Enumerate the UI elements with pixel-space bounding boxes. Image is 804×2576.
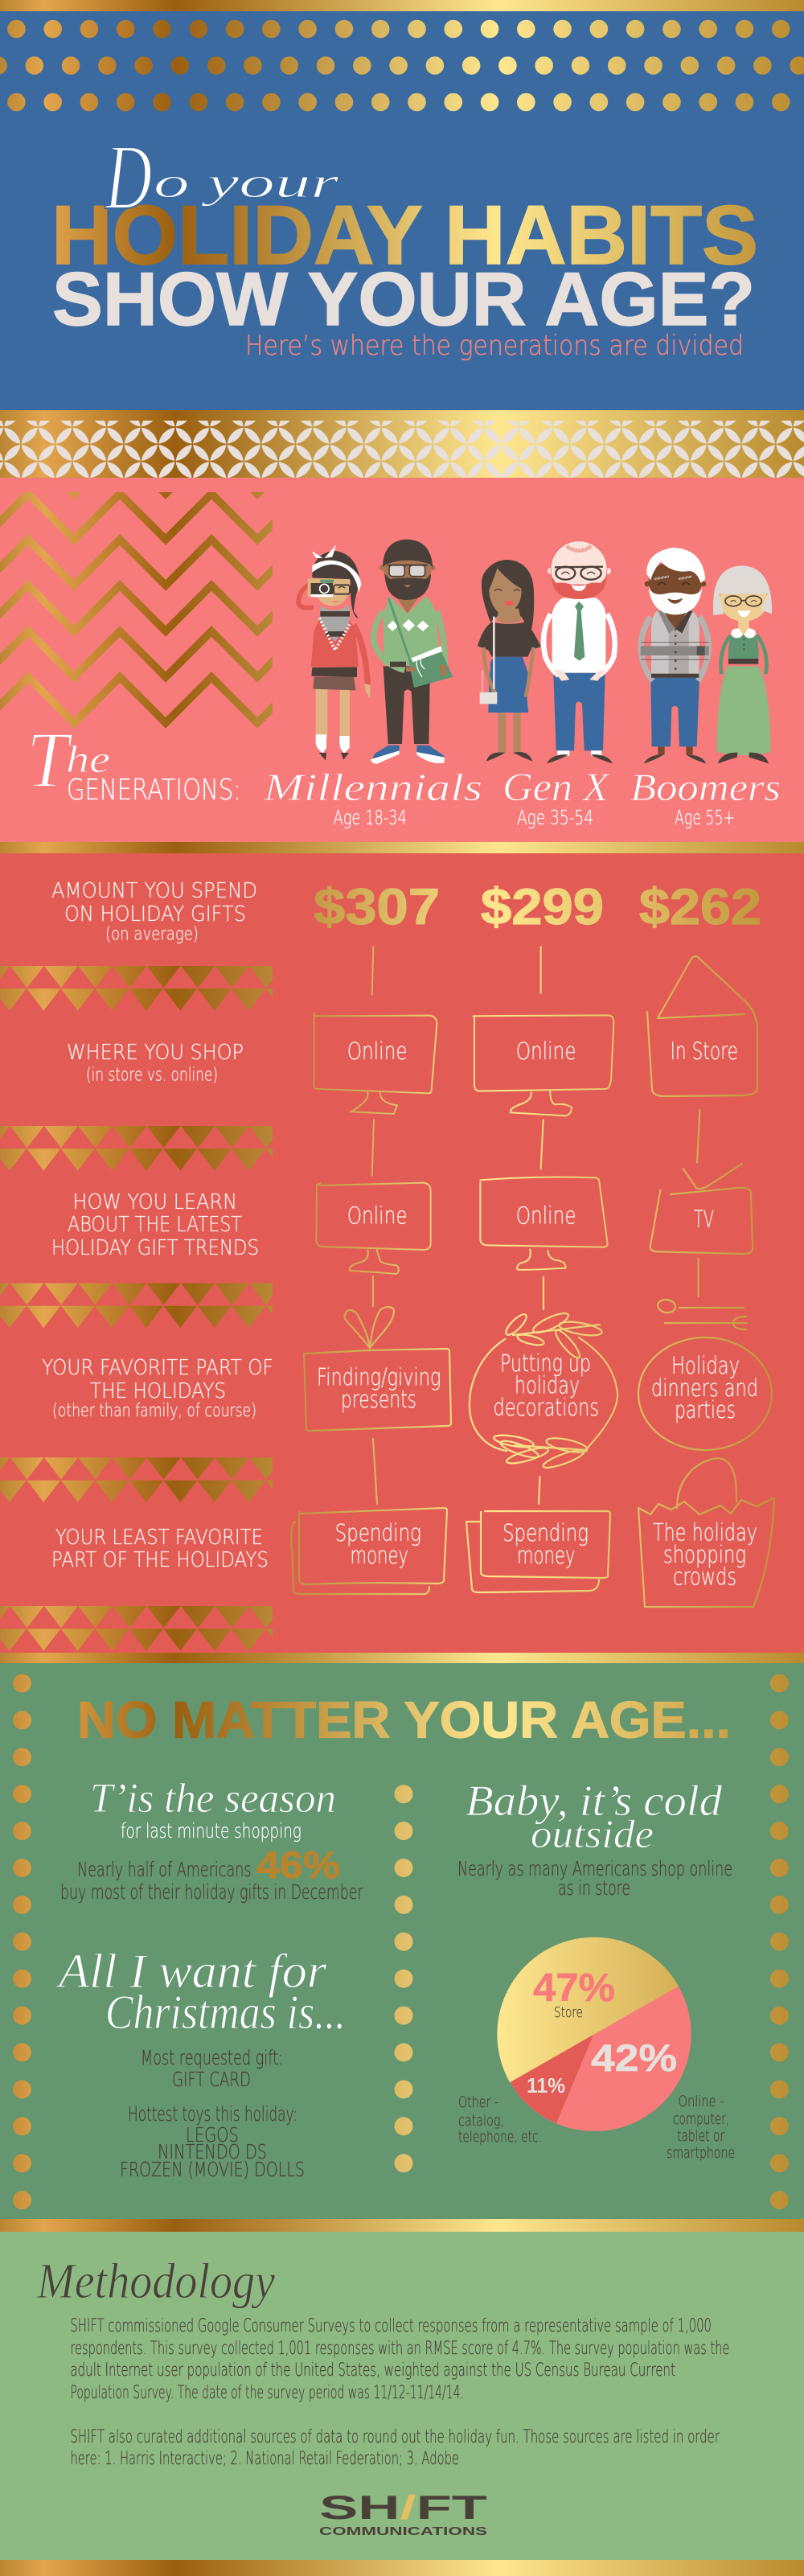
block: last minute shopping — [60, 1776, 363, 1904]
methodology text: Population Survey. The date of the survey period was 11/12-11/14/14. — [70, 2383, 464, 2403]
icon: store — [647, 956, 757, 1096]
block: last minute shopping: for last minute shopping — [121, 1819, 302, 1843]
logo: shift communications — [319, 2488, 488, 2538]
icon: monitor, gen x learn online — [480, 1177, 608, 1270]
block: most wanted gifts: Most requested gift: — [141, 2046, 283, 2069]
title: holiday habits: HOLIDAY HABITS — [51, 189, 758, 282]
panel: the generations — [0, 442, 804, 842]
logo: shift communications: COMMUNICATIONS — [319, 2525, 487, 2538]
row label: amount you spend: (on average) — [105, 925, 199, 945]
character: millennial bearded man — [371, 540, 453, 764]
methodology text — [70, 2316, 729, 2469]
pie label: online: Online - — [679, 2093, 724, 2110]
answers inside icons: Holiday — [671, 1352, 740, 1379]
panel: no matter your age — [0, 1663, 804, 2219]
title: show your age: SHOW YOUR AGE? — [52, 257, 755, 341]
block: last minute shopping: buy most of their holiday gifts in December — [60, 1880, 363, 1904]
row label: where you shop — [67, 1041, 244, 1086]
gold dot columns — [22, 1683, 779, 2201]
triangle bands — [0, 966, 300, 1651]
answers inside icons: money — [351, 1542, 408, 1569]
gold divider band — [0, 1653, 804, 1663]
answers inside icons: Online — [347, 1037, 408, 1065]
gold top band — [0, 0, 804, 11]
answers inside icons: TV — [694, 1206, 714, 1233]
pie chart: where Americans shop: 42% — [591, 2036, 677, 2079]
gold lattice band — [0, 410, 804, 478]
block: shop online: outside — [531, 1811, 654, 1856]
row label: where you shop: WHERE YOU SHOP — [67, 1041, 244, 1065]
icon: gift box — [304, 1307, 451, 1431]
title: do your — [105, 126, 340, 228]
icon: dinner plate — [638, 1337, 772, 1450]
heading: the generations — [27, 715, 241, 807]
row label: amount you spend: AMOUNT YOU SPEND — [51, 879, 257, 903]
answers inside icons: parties — [675, 1396, 736, 1424]
answers inside icons — [317, 1037, 758, 1591]
answers inside icons: In Store — [671, 1037, 738, 1065]
label: millennials — [263, 766, 482, 829]
pie label: online: smartphone — [667, 2144, 735, 2162]
row label: amount you spend — [51, 879, 257, 945]
pie label: other: Other - — [458, 2093, 498, 2111]
heading: the generations: T — [27, 715, 73, 804]
icon: monitor, gen x shop online — [473, 1015, 613, 1115]
block: shop online: as in store — [558, 1876, 630, 1900]
illustration: six characters — [298, 540, 772, 764]
panel: generational differences — [0, 853, 804, 1653]
answers inside icons: Spending — [503, 1519, 589, 1547]
block: last minute shopping: T’is the season — [90, 1776, 336, 1822]
panel: blue title header — [0, 0, 804, 410]
block: most wanted gifts: NINTENDO DS — [158, 2140, 267, 2163]
block: most wanted gifts: FROZEN (MOVIE) DOLLS — [120, 2158, 305, 2181]
character: gen x bald man — [544, 541, 615, 763]
gold polka dot rows — [0, 29, 804, 102]
row label: favorite part — [42, 1356, 273, 1421]
logo: shift communications: SH /FT — [319, 2488, 488, 2526]
answers inside icons: holiday — [515, 1372, 580, 1399]
block: most wanted gifts — [55, 1945, 346, 2181]
pie label: other — [458, 2093, 542, 2146]
answers inside icons: dinners and — [651, 1374, 758, 1402]
spending amounts — [314, 879, 761, 935]
block: most wanted gifts: Christmas is... — [105, 1986, 346, 2039]
answers inside icons: Finding/giving — [317, 1364, 441, 1391]
spending amounts: $307 — [314, 879, 440, 935]
row label: how you learn: HOW YOU LEARN — [72, 1190, 237, 1214]
pie label: other: telephone, etc. — [458, 2128, 542, 2146]
methodology text: here: 1. Harris Interactive; 2. National Retail Federation; 3. Adobe — [70, 2449, 459, 2469]
row label: how you learn: HOLIDAY GIFT TRENDS — [51, 1236, 259, 1260]
row label: amount you spend: ON HOLIDAY GIFTS — [64, 902, 246, 926]
heading: the generations: GENERATIONS: — [67, 774, 241, 807]
gold chevron pattern — [0, 492, 273, 729]
answers inside icons: Online — [347, 1202, 408, 1230]
spending amounts: $262 — [639, 879, 761, 935]
stat: 46%: 46% — [256, 1843, 340, 1886]
icon: monitor, millennials learn online — [316, 1183, 431, 1274]
answers inside icons: presents — [341, 1386, 416, 1413]
block: shop online: Baby, it’s cold — [466, 1777, 723, 1825]
icons: remaining hand-drawn outlines — [291, 956, 774, 1607]
answers inside icons: Spending — [334, 1519, 421, 1547]
icon: wreath — [470, 1310, 617, 1471]
label: millennials: Millennials — [263, 766, 482, 809]
icon: tv — [650, 1164, 753, 1254]
pie chart: where Americans shop — [497, 1937, 691, 2131]
label: boomers — [630, 766, 781, 829]
answers inside icons: Online — [516, 1037, 576, 1065]
character: boomer woman — [713, 565, 772, 763]
gold divider band — [0, 2219, 804, 2232]
title: do your: o your — [154, 158, 340, 207]
block: last minute shopping: Nearly half of Americans — [77, 1858, 251, 1881]
row label: favorite part: YOUR FAVORITE PART OF — [42, 1356, 273, 1380]
row label: favorite part: (other than family, of course) — [52, 1401, 256, 1421]
pie chart: where Americans shop: Store — [554, 2004, 583, 2021]
answers inside icons: shopping — [663, 1541, 746, 1568]
pie label: online: tablet or — [677, 2127, 724, 2145]
label: millennials: Age 18-34 — [333, 806, 407, 829]
pie label: other: catalog, — [458, 2112, 504, 2130]
pie label: online — [667, 2093, 735, 2162]
answers inside icons: Putting up — [500, 1350, 591, 1377]
character: boomer man — [641, 548, 709, 763]
heading: NO MATTER YOUR AGE... — [77, 1691, 731, 1749]
icon: monitor, millennials shop online — [314, 1013, 437, 1114]
row label: how you learn: ABOUT THE LATEST — [68, 1213, 242, 1237]
pie chart: where Americans shop: 47% — [533, 1966, 615, 2010]
icon: fork and spoon — [665, 1308, 747, 1329]
answers inside icons: decorations — [494, 1394, 599, 1421]
block: most wanted gifts: GIFT CARD — [172, 2068, 251, 2091]
gold divider band — [0, 842, 804, 853]
row label: favorite part: THE HOLIDAYS — [90, 1379, 226, 1403]
character: millennial woman with camera — [298, 544, 371, 760]
label: gen x — [503, 764, 611, 829]
block: shop online — [457, 1777, 732, 1900]
pie chart: where Americans shop: 11% — [527, 2073, 565, 2097]
title: do your: D — [105, 126, 152, 228]
label: gen x: Age 35-54 — [517, 806, 593, 829]
row label: where you shop: (in store vs. online) — [86, 1066, 218, 1086]
panel: methodology — [0, 2232, 804, 2561]
label: boomers: Boomers — [630, 766, 781, 809]
heading: methodology: Methodology — [36, 2254, 275, 2309]
block: most wanted gifts: LEGOS — [186, 2123, 239, 2147]
row label: least favorite part — [51, 1526, 269, 1572]
row label: least favorite part: YOUR LEAST FAVORITE — [55, 1526, 263, 1550]
block: most wanted gifts: All I want for — [55, 1945, 327, 1998]
icon: spending cards, gen x — [466, 1511, 610, 1592]
answers inside icons: money — [517, 1542, 576, 1569]
row label: least favorite part: PART OF THE HOLIDAYS — [51, 1548, 269, 1572]
heading: the generations: he — [66, 738, 110, 781]
icon: spending cards, millennials — [291, 1508, 447, 1594]
label: gen x: Gen X — [503, 764, 611, 809]
row label: how you learn — [51, 1190, 259, 1260]
gold bottom band — [0, 2560, 804, 2576]
label: boomers: Age 55+ — [675, 806, 735, 829]
block: most wanted gifts: Hottest toys this holiday: — [128, 2102, 297, 2126]
pie label: online: computer, — [673, 2110, 729, 2128]
answers inside icons: crowds — [673, 1563, 736, 1591]
connectors — [373, 1110, 699, 1504]
spending amounts: $299 — [481, 879, 604, 935]
answers inside icons: Online — [516, 1202, 576, 1230]
icon: shopping bag — [638, 1458, 774, 1607]
answers inside icons: The holiday — [653, 1519, 757, 1547]
icons: monitors and connectors, columns one and two — [314, 947, 613, 1274]
subtitle: Here’s where the generations are divided — [245, 330, 744, 362]
character: gen x woman — [478, 560, 541, 762]
